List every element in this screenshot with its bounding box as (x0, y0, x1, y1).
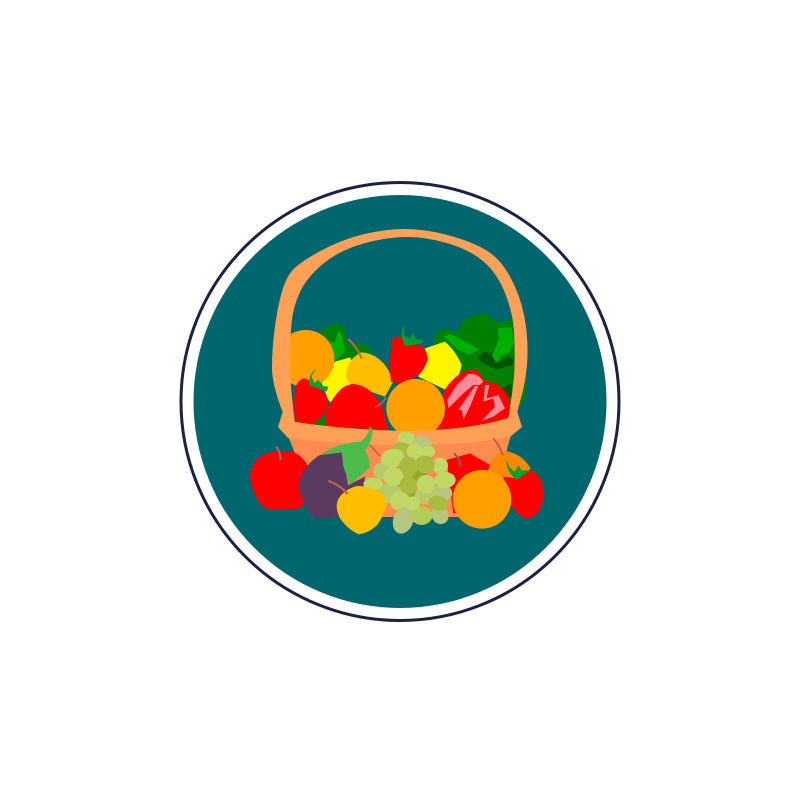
orange, centre (386, 379, 445, 438)
red strawberry, left (294, 368, 328, 425)
golden pear (346, 339, 393, 397)
red apple, front left (250, 447, 308, 510)
red bell pepper (437, 370, 510, 430)
basket stem (370, 445, 380, 456)
golden pear, front (328, 481, 387, 534)
basket handle (272, 229, 528, 424)
orange, front (453, 470, 511, 529)
front fruit (250, 426, 544, 529)
icon: fruit basket with fruit (250, 229, 544, 537)
bunch of grapes (363, 432, 456, 537)
basket body (288, 435, 511, 517)
red apple (325, 384, 388, 430)
yellow lemon, right (418, 342, 462, 391)
small green leaf under strawberry (313, 413, 328, 427)
back fruit inside basket (277, 323, 462, 407)
eggplant (298, 426, 373, 519)
red apple, front right (447, 453, 490, 513)
teal disc (194, 195, 606, 608)
yellow lemon, left (322, 357, 365, 407)
leafy greens, left (321, 323, 373, 373)
outer navy ring (181, 182, 619, 620)
red strawberry, centre (390, 323, 428, 383)
orange fruit behind strawberry (489, 438, 531, 482)
fruit at front of basket (294, 368, 445, 438)
eggplant leaf (320, 426, 373, 485)
orange, top left (277, 330, 334, 387)
leafy greens, right (434, 313, 527, 413)
basket rim (278, 411, 522, 445)
red strawberry, front right (503, 459, 544, 519)
